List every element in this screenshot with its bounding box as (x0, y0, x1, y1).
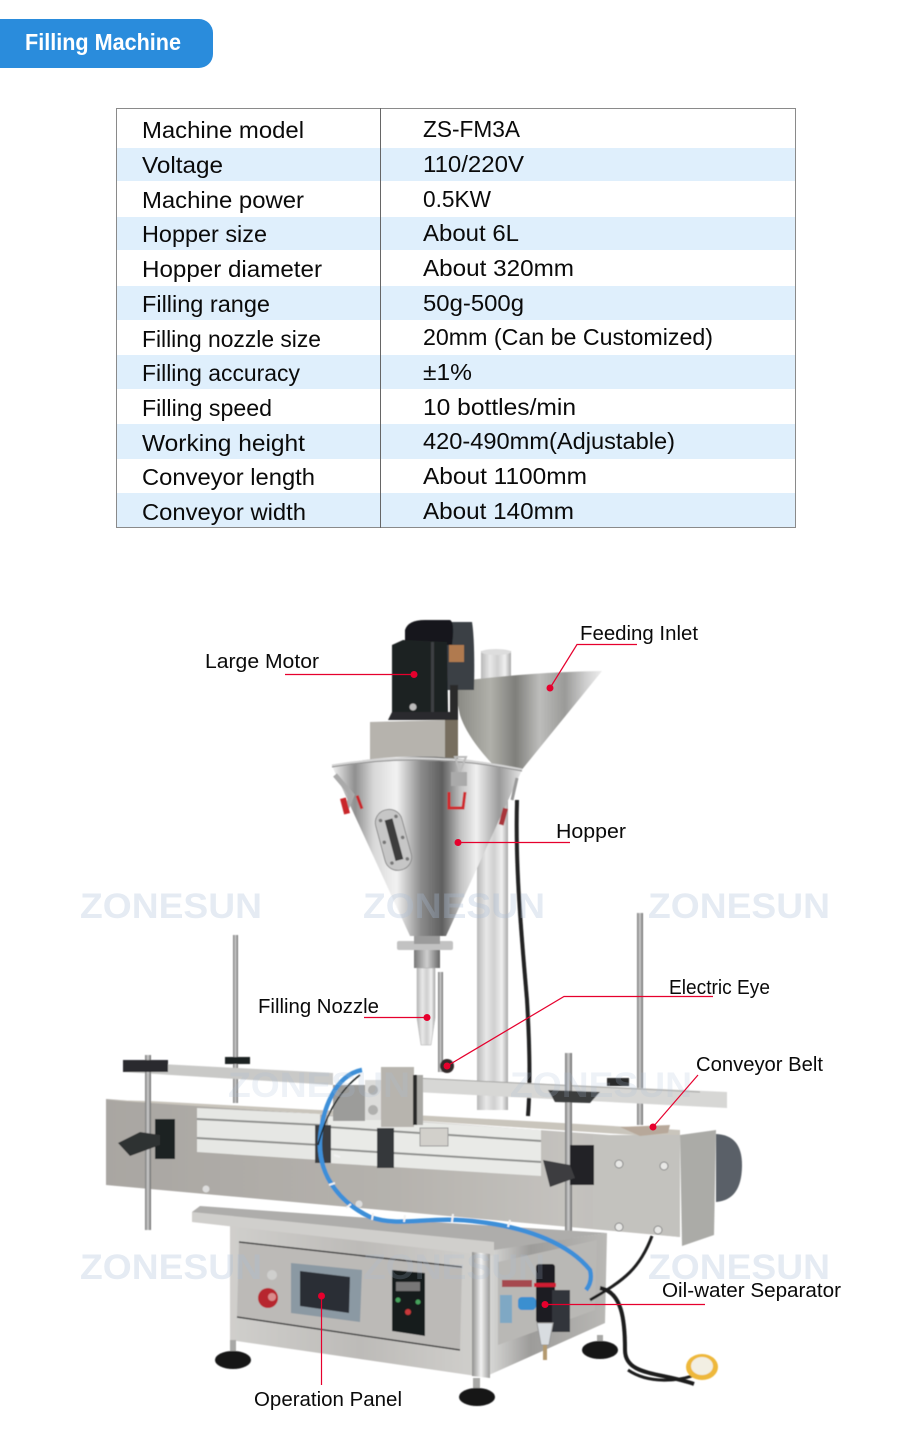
row: filling nozzle size: 20mm (Can be Customized) (423, 324, 713, 350)
watermarks: ZONESUN (510, 1066, 692, 1105)
watermarks: ZONESUN (80, 887, 262, 926)
callout: operation panel (254, 1292, 402, 1411)
cable (517, 800, 529, 1116)
callout: electric eye: Electric Eye (669, 977, 770, 999)
electric eye (440, 1059, 454, 1073)
operation screen (291, 1263, 362, 1322)
row: machine model (142, 116, 520, 143)
conveyor plate (106, 1099, 680, 1237)
watermarks: ZONESUN (648, 887, 830, 926)
row: filling speed: 10 bottles/min (423, 394, 576, 420)
row: filling speed: Filling speed (142, 395, 272, 421)
air hose (318, 1070, 591, 1290)
row: machine power: 0.5KW (423, 186, 492, 212)
watermarks: ZONESUN (363, 1248, 545, 1287)
watermarks: ZONESUN (80, 1248, 262, 1287)
row: voltage: 110/220V (423, 151, 524, 177)
row: filling nozzle size: Filling nozzle size (142, 326, 321, 352)
power cables and foot pedal (590, 1236, 718, 1384)
emergency stop (258, 1288, 278, 1308)
motor mount box (370, 720, 458, 760)
row: hopper diameter: Hopper diameter (142, 256, 322, 282)
row: filling nozzle size (142, 324, 713, 352)
row: conveyor width (142, 498, 574, 525)
front face (230, 1225, 490, 1378)
callout: conveyor belt: Conveyor Belt (696, 1054, 823, 1076)
row: voltage (142, 151, 524, 178)
speed controller (392, 1270, 425, 1336)
vertical rods (233, 913, 643, 1125)
callout: filling nozzle: Filling Nozzle (258, 996, 379, 1018)
row: working height: Working height (142, 430, 305, 456)
row: conveyor width: Conveyor width (142, 499, 306, 525)
callout: conveyor belt (650, 1054, 823, 1130)
conveyor motor (716, 1134, 742, 1202)
callout: hopper: Hopper (556, 821, 626, 843)
row: filling range: Filling range (142, 291, 270, 317)
row: machine model: Machine model (142, 117, 304, 143)
corner post (472, 1252, 490, 1378)
sight glass (372, 806, 415, 873)
large motor (388, 620, 474, 720)
row: hopper diameter (142, 255, 574, 282)
callout: oil-water separator (542, 1280, 841, 1308)
support column (477, 649, 511, 1110)
machine illustration (106, 620, 742, 1406)
feet (215, 1335, 618, 1406)
row: machine power (142, 186, 492, 213)
row: hopper size: Hopper size (142, 221, 267, 247)
callout: feeding inlet (546, 623, 698, 692)
callout: oil-water separator: Oil-water Separator (662, 1280, 841, 1302)
row: filling range (142, 290, 524, 317)
aluminium profiles (197, 1067, 541, 1176)
base cabinet (192, 1206, 607, 1378)
table top (192, 1206, 607, 1250)
oil-water separator unit (518, 1264, 570, 1360)
title badge (0, 19, 213, 68)
conveyor end plate and flap (593, 1125, 716, 1246)
callout: feeding inlet: Feeding Inlet (580, 623, 698, 645)
row: filling range: 50g-500g (423, 290, 524, 316)
row: conveyor width: About 140mm (423, 498, 574, 524)
row: hopper diameter: About 320mm (423, 255, 574, 281)
row: hopper size (142, 220, 519, 247)
callout: operation panel: Operation Panel (254, 1389, 402, 1411)
callout: large motor: Large Motor (205, 651, 319, 673)
watermarks: ZONESUN (228, 1066, 410, 1105)
row: filling accuracy: ±1% (423, 359, 472, 385)
row: filling accuracy: Filling accuracy (142, 360, 300, 386)
watermarks: ZONESUN (648, 1248, 830, 1287)
watermarks: ZONESUN (363, 887, 545, 926)
right side (489, 1233, 607, 1375)
feeding inlet funnel (453, 671, 602, 772)
control panel face (237, 1242, 462, 1350)
title badge: Filling Machine (25, 29, 181, 55)
callout: large motor (205, 651, 418, 678)
hopper cone (332, 756, 522, 936)
row: voltage: Voltage (142, 152, 223, 178)
right clamp (543, 1053, 600, 1260)
specification table (116, 108, 796, 528)
left clamp (118, 1055, 175, 1230)
callout: filling nozzle (258, 996, 430, 1021)
hopper clamps (335, 757, 517, 825)
row: machine power: Machine power (142, 187, 304, 213)
row: working height (142, 428, 675, 456)
row: conveyor length (142, 463, 587, 490)
guide rails (123, 1057, 727, 1108)
row: filling accuracy (142, 359, 472, 386)
row: conveyor length: Conveyor length (142, 464, 315, 490)
watermarks (80, 887, 830, 1287)
row: conveyor length: About 1100mm (423, 463, 587, 489)
row: filling speed (142, 394, 576, 421)
centre slide block (333, 1067, 423, 1127)
callout: electric eye (444, 977, 770, 1070)
row: machine model: ZS-FM3A (423, 116, 520, 142)
row: working height: 420-490mm(Adjustable) (423, 428, 675, 454)
row: hopper size: About 6L (423, 220, 519, 246)
nozzle assembly (397, 936, 453, 1072)
callout: hopper (454, 821, 626, 846)
